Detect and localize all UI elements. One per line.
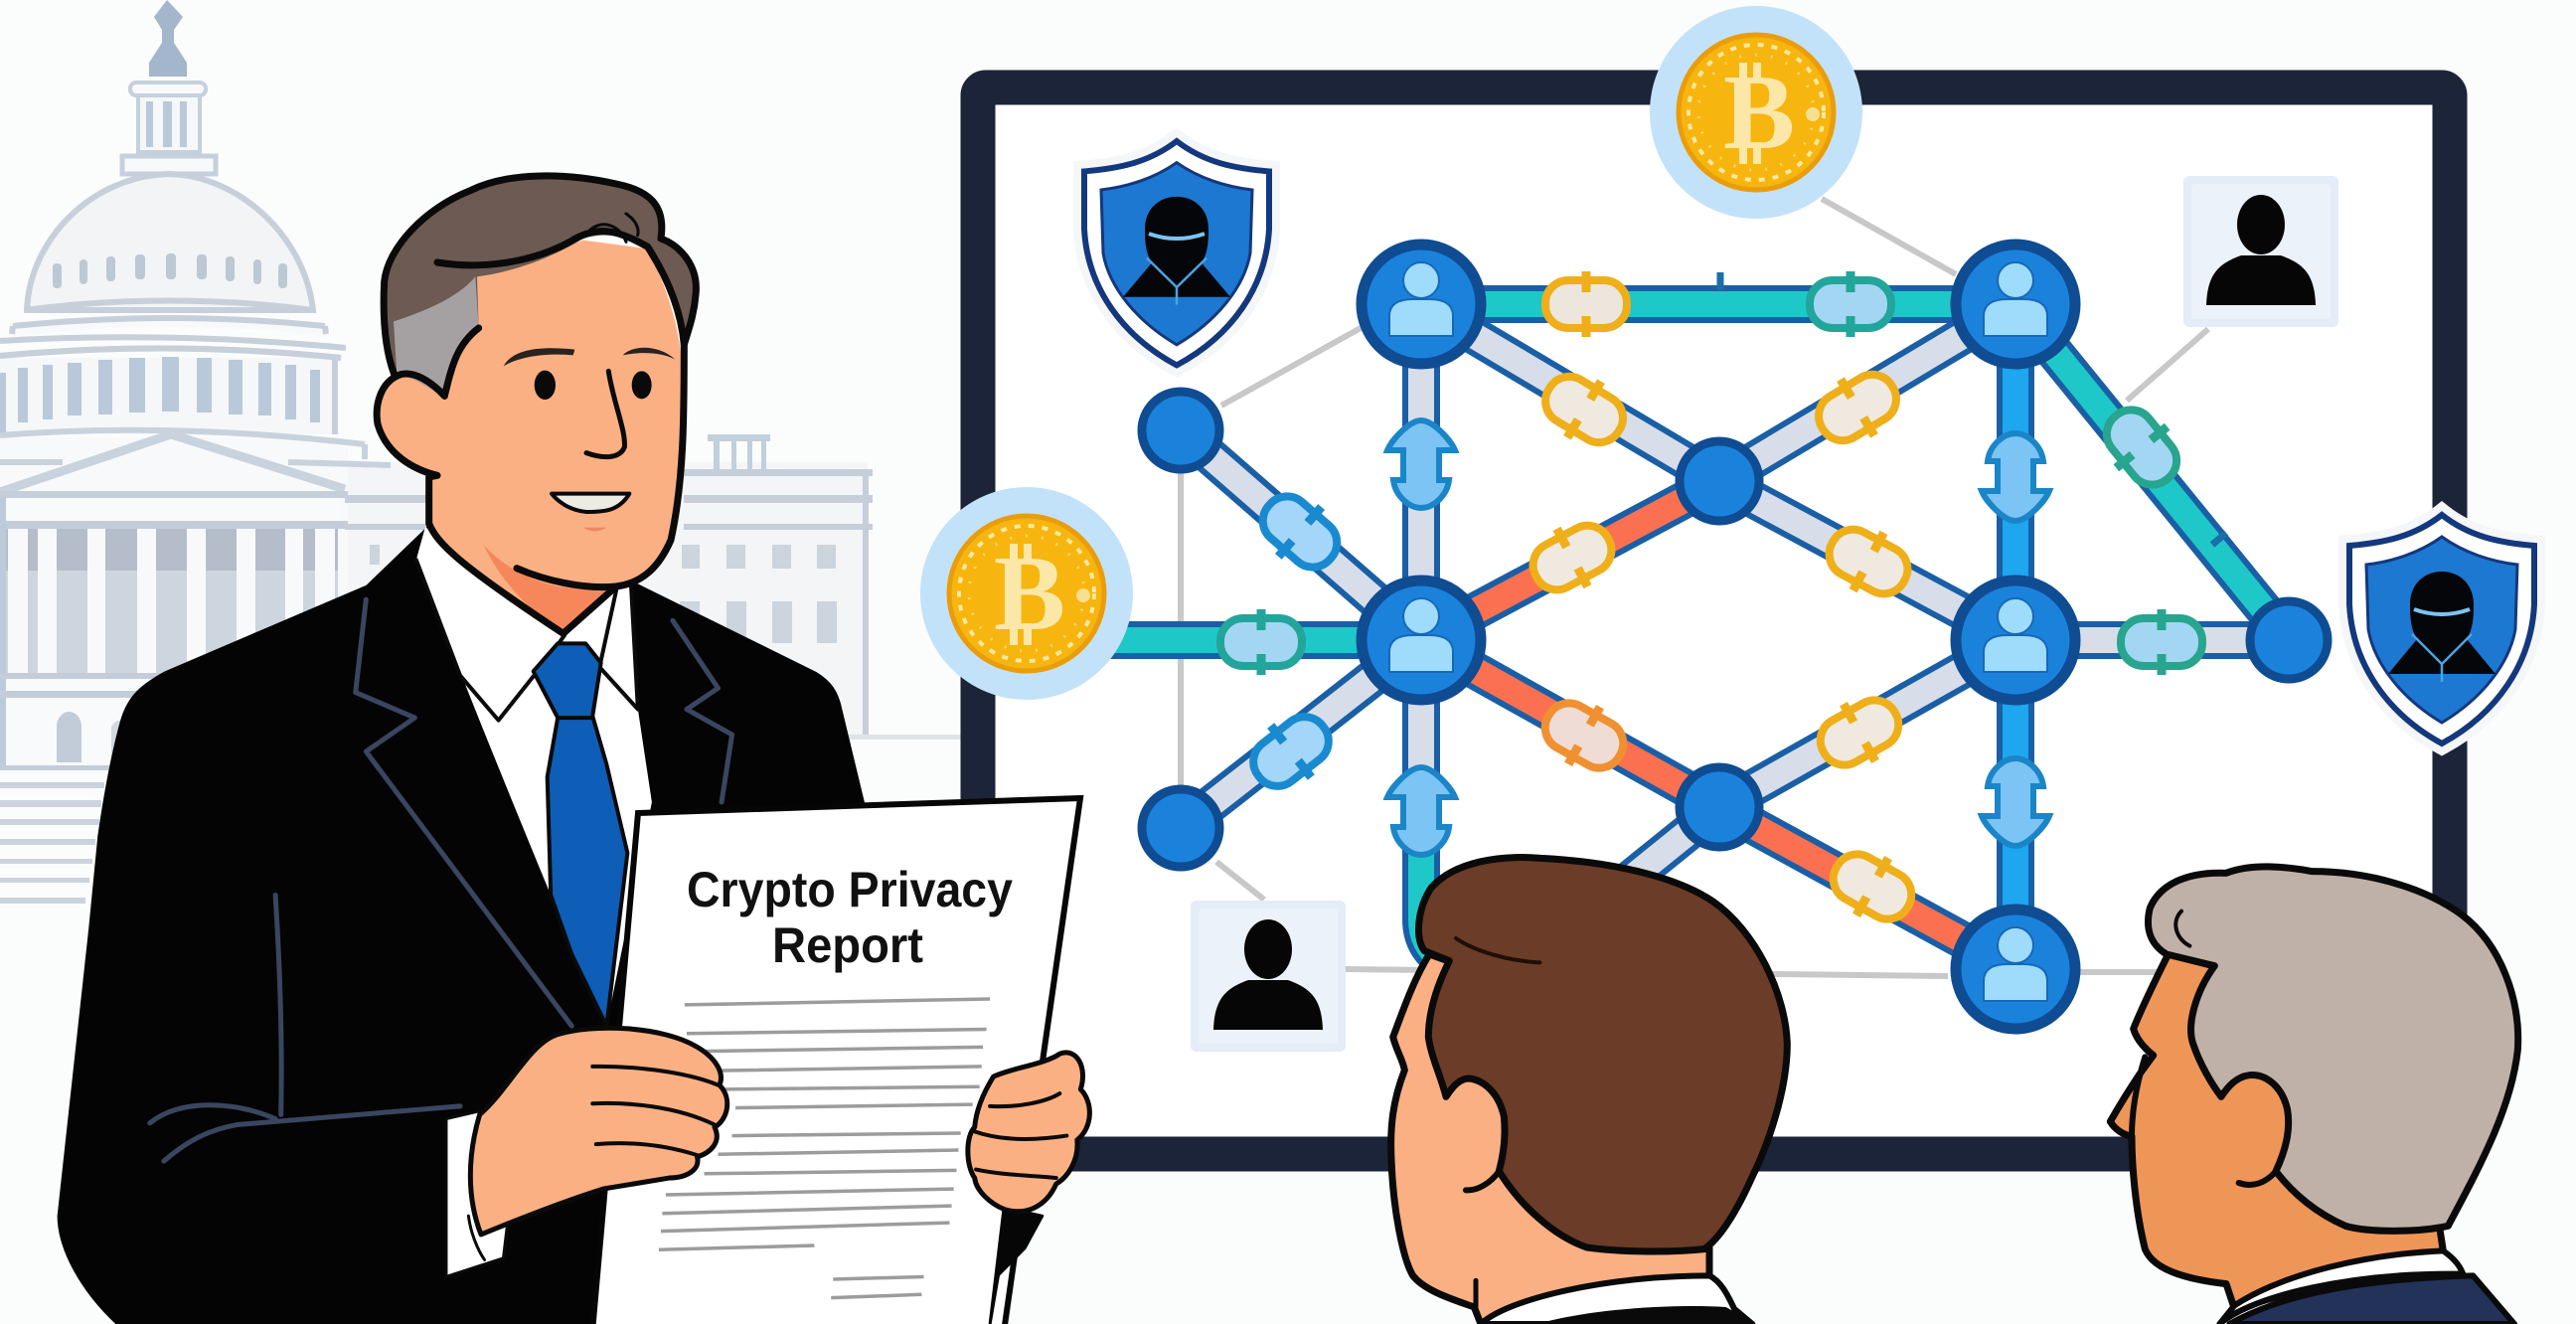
user nodes [1362, 245, 2075, 1029]
bitcoin coin: left [920, 487, 1133, 700]
user card: top right [2183, 176, 2338, 327]
presenter hands [468, 1028, 1089, 1324]
report title: Crypto Privacy [687, 862, 1013, 917]
network connectors [1181, 199, 2208, 976]
chain links [1220, 271, 2202, 935]
presenter body [60, 527, 865, 1324]
audience member: brown hair [1391, 858, 1787, 1324]
arrows on vertical edges [1387, 420, 2049, 855]
shield: hooded figure right [2349, 515, 2534, 744]
presenter head [377, 176, 696, 633]
user card: bottom left [1191, 901, 1346, 1052]
network edges [1053, 272, 2289, 969]
shield: hooded figure left [1084, 141, 1269, 365]
bitcoin coin: top [1650, 6, 1862, 219]
report title: Report [772, 917, 923, 973]
audience member: grey hair [2110, 867, 2518, 1324]
presentation board [978, 87, 2450, 1154]
report text lines [659, 999, 990, 1298]
small network nodes [1142, 392, 2328, 867]
report document [592, 798, 1080, 1324]
capitol building [0, 0, 964, 904]
